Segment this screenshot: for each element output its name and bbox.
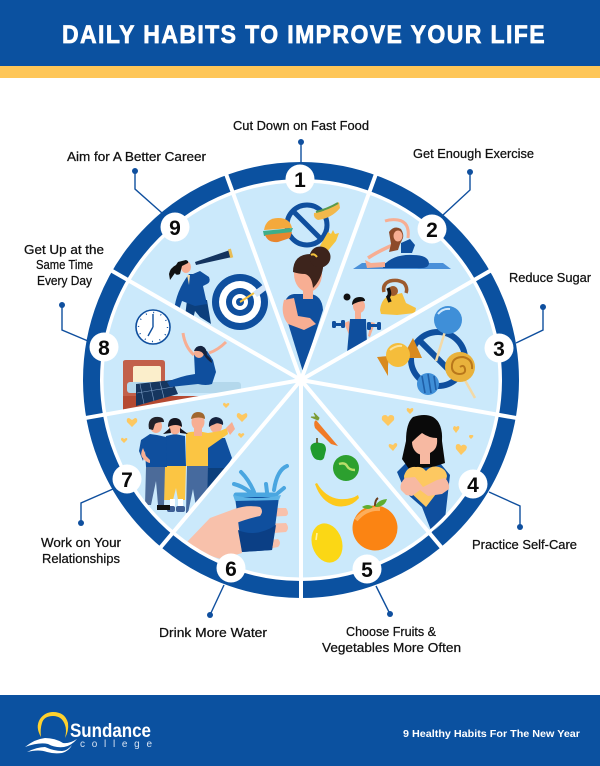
number badges [90,164,514,584]
person 1 [139,417,170,510]
icon: fries [320,230,339,250]
yoga mat [353,263,451,269]
number badges: 2 [426,219,438,242]
seated yoga woman [380,280,416,315]
hearts [121,403,247,443]
logo [25,712,152,753]
hearts [382,408,473,455]
connector lines and dots [59,139,546,618]
number badges: 5 [361,559,373,582]
icon: swirl lollipop [445,352,475,398]
number badges: 7 [121,469,133,492]
woman hugging heart [397,415,450,533]
icon: no sign [411,332,465,386]
splash [234,466,287,495]
sector 6 illustration: drink water [187,466,288,559]
bed [123,360,241,413]
person 4 [207,417,232,488]
icon: target [212,274,268,330]
habit labels: Reduce Sugar [509,271,591,285]
sector 9 illustration: better career [169,249,268,330]
icon: striped candy [417,373,439,395]
habit labels: Every Day [37,274,93,288]
spokes and ring gaps [84,173,518,600]
habit labels [24,119,591,655]
cup [233,495,281,552]
icon: pepper [310,438,326,460]
businesswoman [169,260,211,324]
icon: burger [263,218,293,242]
logo: college [80,739,152,750]
icon: broccoli [333,455,359,481]
stretching woman [365,220,429,268]
sector 7 illustration: relationships [121,403,247,517]
footer [0,695,600,766]
dumbbells [332,320,381,330]
habit labels: Work on Your [41,536,121,550]
icon: carrot [311,413,338,446]
number badges: 1 [294,169,306,192]
icon: orange [352,498,398,550]
header banner [0,0,600,78]
sector 5 illustration: fruits and vegetables [307,413,398,567]
icon: hot dog [314,202,340,220]
thumb [236,506,262,522]
dumbbell woman [332,294,381,353]
sector 4 illustration: self-care [382,408,473,533]
footer tagline: 9 Healthy Habits For The New Year [403,728,580,740]
habit labels: Drink More Water [159,626,267,640]
person 3 [186,412,235,515]
sector 8 illustration: get up on time [123,310,241,413]
icon: blue lollipop [434,306,462,361]
woman waking [167,333,226,387]
icon: no sign [287,205,327,245]
sector 2 illustration: exercise [332,220,451,353]
habit labels: Relationships [42,552,120,566]
sector 1 illustration: cut down on fast food [263,202,340,372]
number badges: 3 [493,338,505,361]
icon: lemon [307,519,347,567]
number badges: 4 [467,474,479,497]
woman thinking [283,246,330,372]
number badges: 9 [169,217,181,240]
sector 3 illustration: reduce sugar [377,306,475,398]
icon: banana [315,483,359,506]
number badges: 6 [225,558,237,581]
habit labels: Get Up at the [24,243,104,257]
icon: clock [136,310,170,344]
habit labels: Cut Down on Fast Food [233,119,369,133]
hand [187,508,288,559]
habit labels: Get Enough Exercise [413,147,534,161]
logo: Sundance [70,721,151,742]
wheel base [92,170,510,590]
person 2 [163,418,188,512]
title: DAILY HABITS TO IMPROVE YOUR LIFE [62,21,546,49]
habit labels: Choose Fruits & [346,625,437,639]
habit labels: Aim for A Better Career [67,150,206,164]
habit labels: Same Time [36,258,93,272]
telescope [195,249,233,265]
habit labels: Vegetables More Often [322,641,461,655]
habit labels: Practice Self-Care [472,538,577,552]
icon: wrapped candy [377,338,422,376]
number badges: 8 [98,337,110,360]
